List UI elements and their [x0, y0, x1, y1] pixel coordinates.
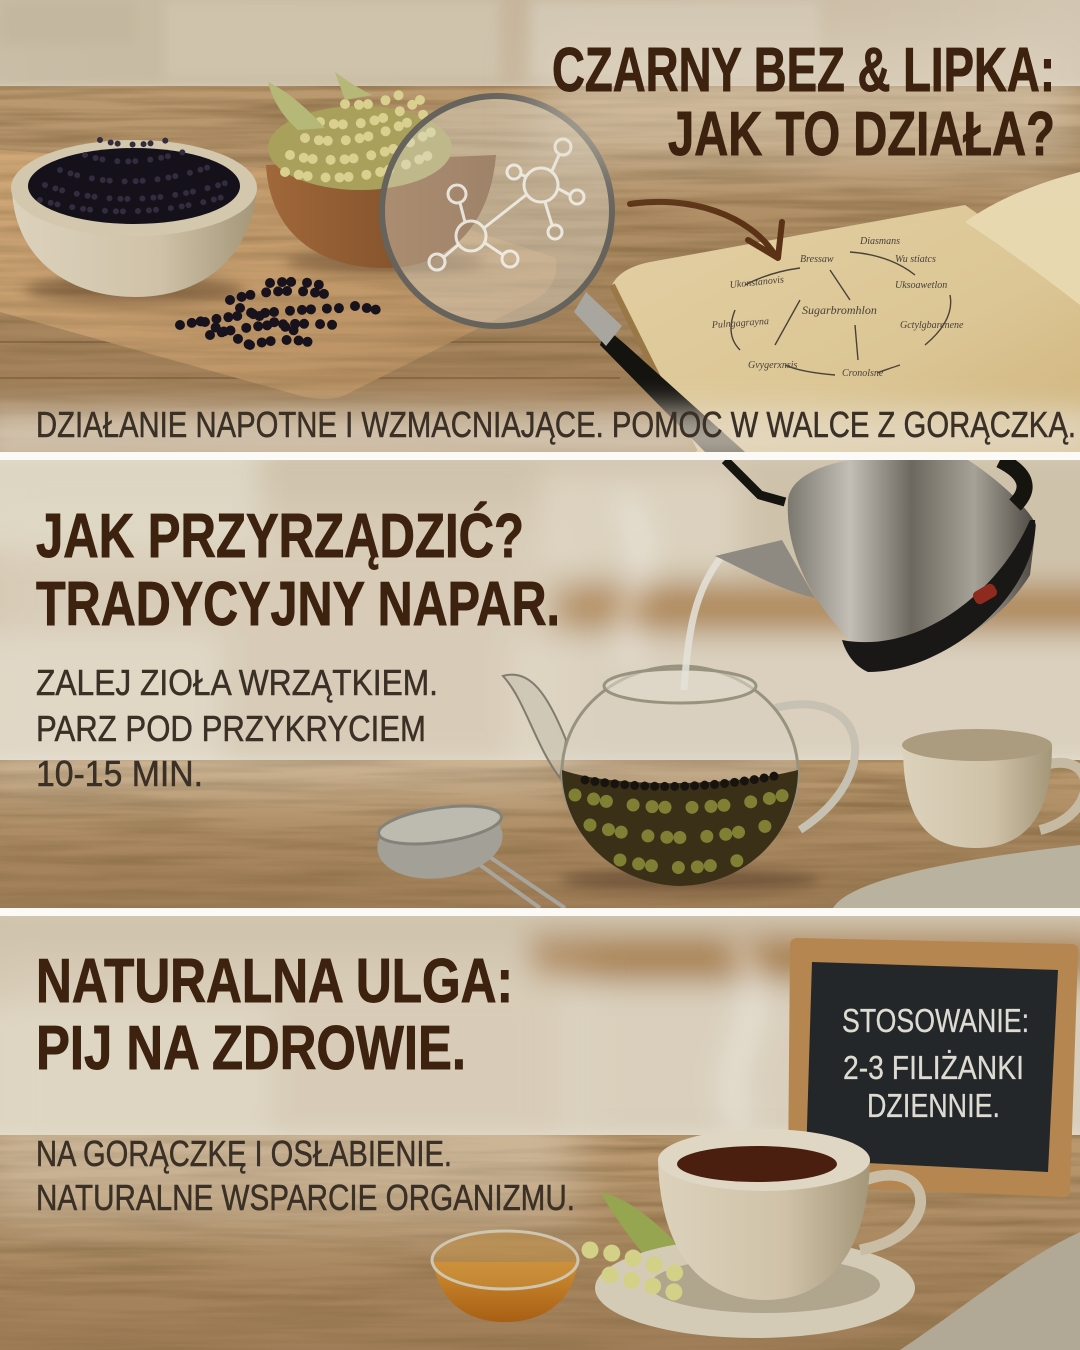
handwritten cycle diagram: Pulngagrayna [710, 316, 769, 331]
curved arrow [630, 202, 782, 258]
panel: how it works [0, 0, 1080, 468]
wooden table [0, 86, 1080, 452]
glass teapot [503, 666, 855, 892]
blurred kitchen background [0, 440, 1080, 770]
steam [732, 940, 753, 1130]
scattered elderberries [180, 282, 378, 345]
handwritten cycle diagram: Wu stiatcs [895, 254, 936, 265]
caption haze [0, 408, 1080, 468]
handwritten cycle diagram: Gvygerxnsis [748, 360, 798, 371]
pouring water [684, 556, 722, 690]
panel: preparation [0, 440, 1080, 908]
instructions: PARZ POD PRZYKRYCIEM [36, 708, 426, 749]
chalk text: STOSOWANIE: [842, 1002, 1029, 1039]
divider [0, 452, 1080, 460]
chalk text: DZIENNIE. [867, 1087, 1000, 1124]
cup on saucer [595, 1129, 921, 1338]
bowl of elderberries [11, 138, 257, 304]
heading: PIJ NA ZDROWIE. [36, 1014, 466, 1083]
instructions: 10-15 MIN. [36, 753, 203, 794]
handwritten cycle diagram: Sugarbromhlon [802, 303, 877, 317]
panel: natural relief [0, 895, 1080, 1350]
chalk text [843, 1008, 1027, 1118]
heading [554, 47, 1053, 156]
handwritten cycle diagram: Cronolsne [842, 368, 884, 379]
instructions [36, 669, 436, 786]
chalk text: 2-3 FILIŻANKI [843, 1049, 1024, 1086]
linden leaf [600, 1192, 676, 1252]
cutting board [0, 150, 557, 399]
ceramic cup [902, 729, 1080, 848]
handwritten cycle diagram [710, 236, 964, 379]
divider [0, 908, 1080, 916]
open book [612, 172, 1080, 452]
heading: TRADYCYJNY NAPAR. [36, 570, 560, 639]
steel kettle [715, 458, 1036, 672]
benefits text [36, 1133, 575, 1218]
magnifying glass [382, 96, 745, 452]
handwritten cycle diagram: Diasmans [859, 236, 900, 247]
heading [36, 947, 513, 1083]
steam [620, 500, 642, 660]
handwritten cycle diagram: Uksoawetlon [895, 280, 947, 291]
linden flowers [590, 1250, 690, 1295]
heading: NATURALNA ULGA: [36, 947, 513, 1016]
wooden table [0, 1135, 1080, 1350]
benefits text: NATURALNE WSPARCIE ORGANIZMU. [36, 1177, 575, 1218]
wooden bowl of linden flowers [266, 72, 496, 274]
honey bowl [432, 1231, 578, 1322]
handwritten cycle diagram: Bressaw [800, 254, 834, 265]
handwritten cycle diagram: Gctylgbarenene [900, 320, 964, 331]
blurred kitchen background [0, 916, 1080, 1135]
blurred kitchen background [0, 0, 1080, 92]
linen towel [833, 845, 1080, 908]
heading haze [0, 505, 570, 795]
wooden table [0, 760, 1080, 908]
linen towel [900, 1232, 1080, 1350]
heading: JAK PRZYRZĄDZIĆ? [36, 502, 524, 571]
heading haze [540, 40, 1080, 165]
benefits text: NA GORĄCZKĘ I OSŁABIENIE. [36, 1133, 452, 1174]
instructions: ZALEJ ZIOŁA WRZĄTKIEM. [36, 662, 438, 703]
mesh strainer [373, 798, 565, 908]
chalkboard [788, 938, 1078, 1197]
heading [36, 502, 560, 639]
handwritten cycle diagram: Ukonstanovis [729, 274, 785, 291]
text haze [0, 955, 580, 1225]
molecule [429, 139, 584, 270]
